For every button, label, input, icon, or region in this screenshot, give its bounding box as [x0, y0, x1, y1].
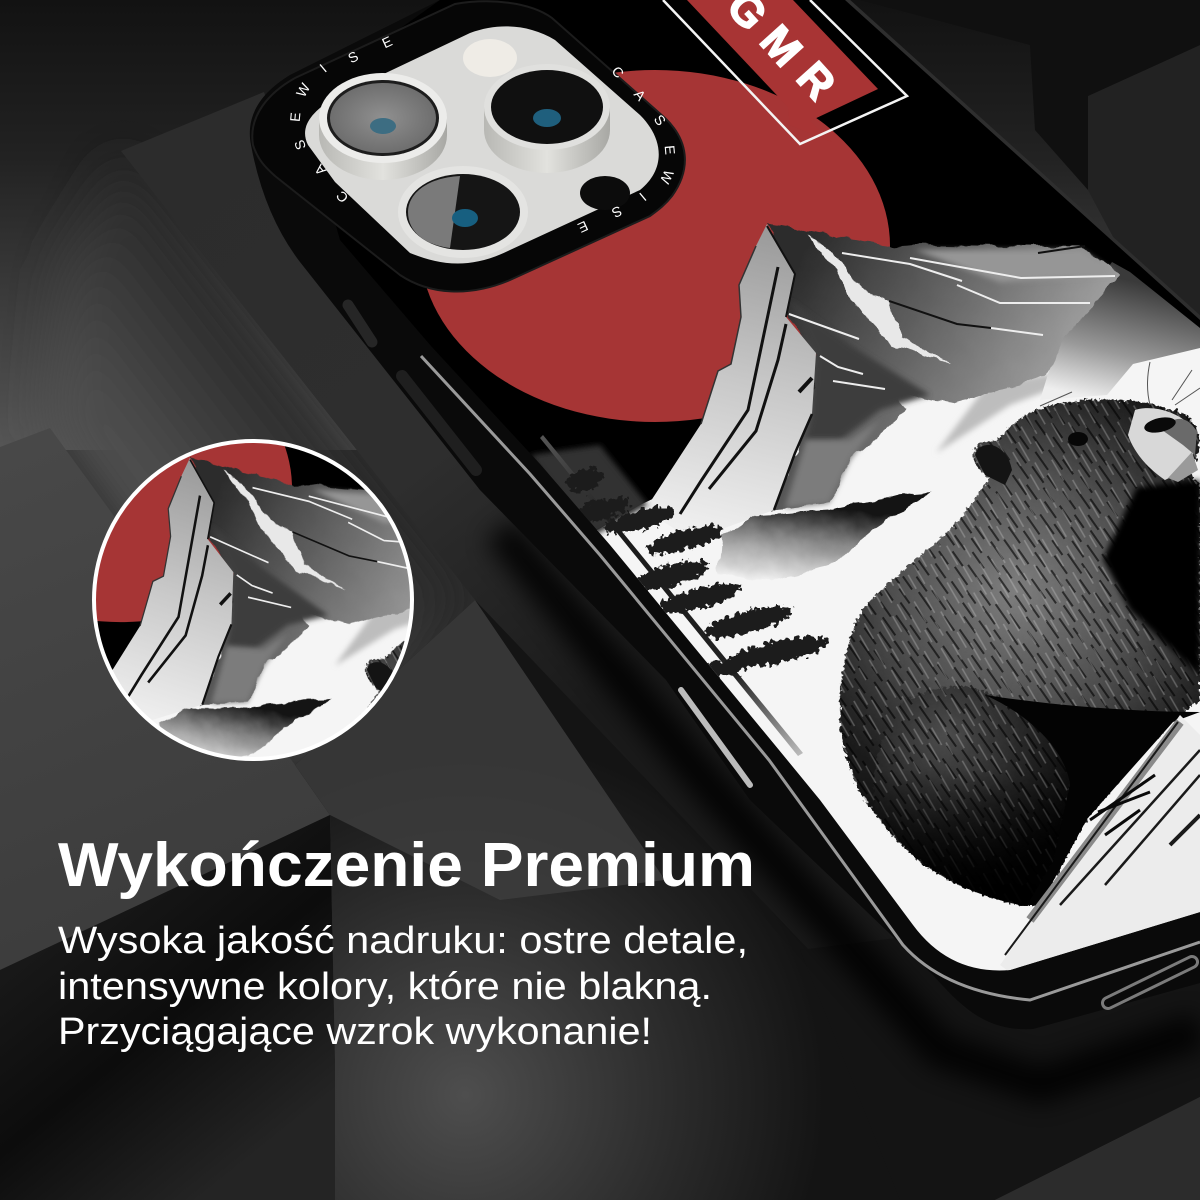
dark slope behind trees: [530, 445, 648, 538]
CASEWISE lettering left: W: [293, 80, 314, 100]
CASEWISE lettering right: S: [651, 112, 669, 128]
heading: Wykończenie Premium: [58, 831, 755, 900]
phone case body: [250, 0, 1200, 1029]
body text: Wysoka jakość nadruku: ostre detale,: [58, 920, 748, 962]
printed artwork: red sun, mountains, trees, beaver: [300, 0, 1200, 1000]
CASEWISE lettering right: [575, 63, 678, 236]
CASEWISE lettering left: S: [291, 138, 309, 152]
body text: [58, 920, 748, 1053]
chrome side highlight: [681, 690, 750, 785]
CASEWISE lettering left: [287, 33, 395, 206]
red GMR band: [687, 0, 878, 118]
side button: long: [402, 376, 476, 470]
CASEWISE lettering left: A: [310, 161, 329, 179]
main lens: [319, 73, 447, 180]
microphone hole: [580, 176, 630, 210]
magnified detail circle: [92, 439, 414, 761]
flash: [463, 39, 517, 77]
pine tree: [540, 435, 829, 756]
CASEWISE lettering right: C: [609, 63, 627, 81]
CASEWISE lettering left: C: [333, 188, 351, 206]
phone shadow: [500, 530, 1200, 1085]
GMR letters: R: [787, 53, 845, 109]
white outline frame: [663, 0, 907, 144]
CASEWISE lettering right: W: [657, 168, 677, 187]
side button: small: [348, 305, 372, 342]
CASEWISE lettering right: S: [609, 203, 625, 221]
charging port: [1108, 962, 1192, 1003]
telephoto lens: [484, 64, 610, 173]
GMR letters: M: [750, 16, 811, 76]
body text: Przyciągające wzrok wykonanie!: [58, 1011, 652, 1053]
CASEWISE lettering right: E: [575, 218, 591, 236]
CASEWISE lettering left: S: [345, 48, 361, 66]
GMR letters: [730, 0, 834, 104]
CASEWISE lettering right: E: [662, 145, 678, 155]
CASEWISE lettering left: E: [379, 33, 395, 51]
CASEWISE lettering left: I: [316, 61, 330, 75]
CASEWISE lettering right: A: [631, 86, 650, 104]
CASEWISE lettering left: E: [287, 112, 303, 122]
CASEWISE lettering right: I: [636, 190, 650, 204]
body text: intensywne kolory, które nie blakną.: [58, 966, 712, 1008]
camera island: [252, 1, 685, 291]
camera glass: [305, 26, 659, 264]
metallic rim stripe: [421, 356, 1200, 1000]
ultrawide lens: [398, 166, 528, 258]
